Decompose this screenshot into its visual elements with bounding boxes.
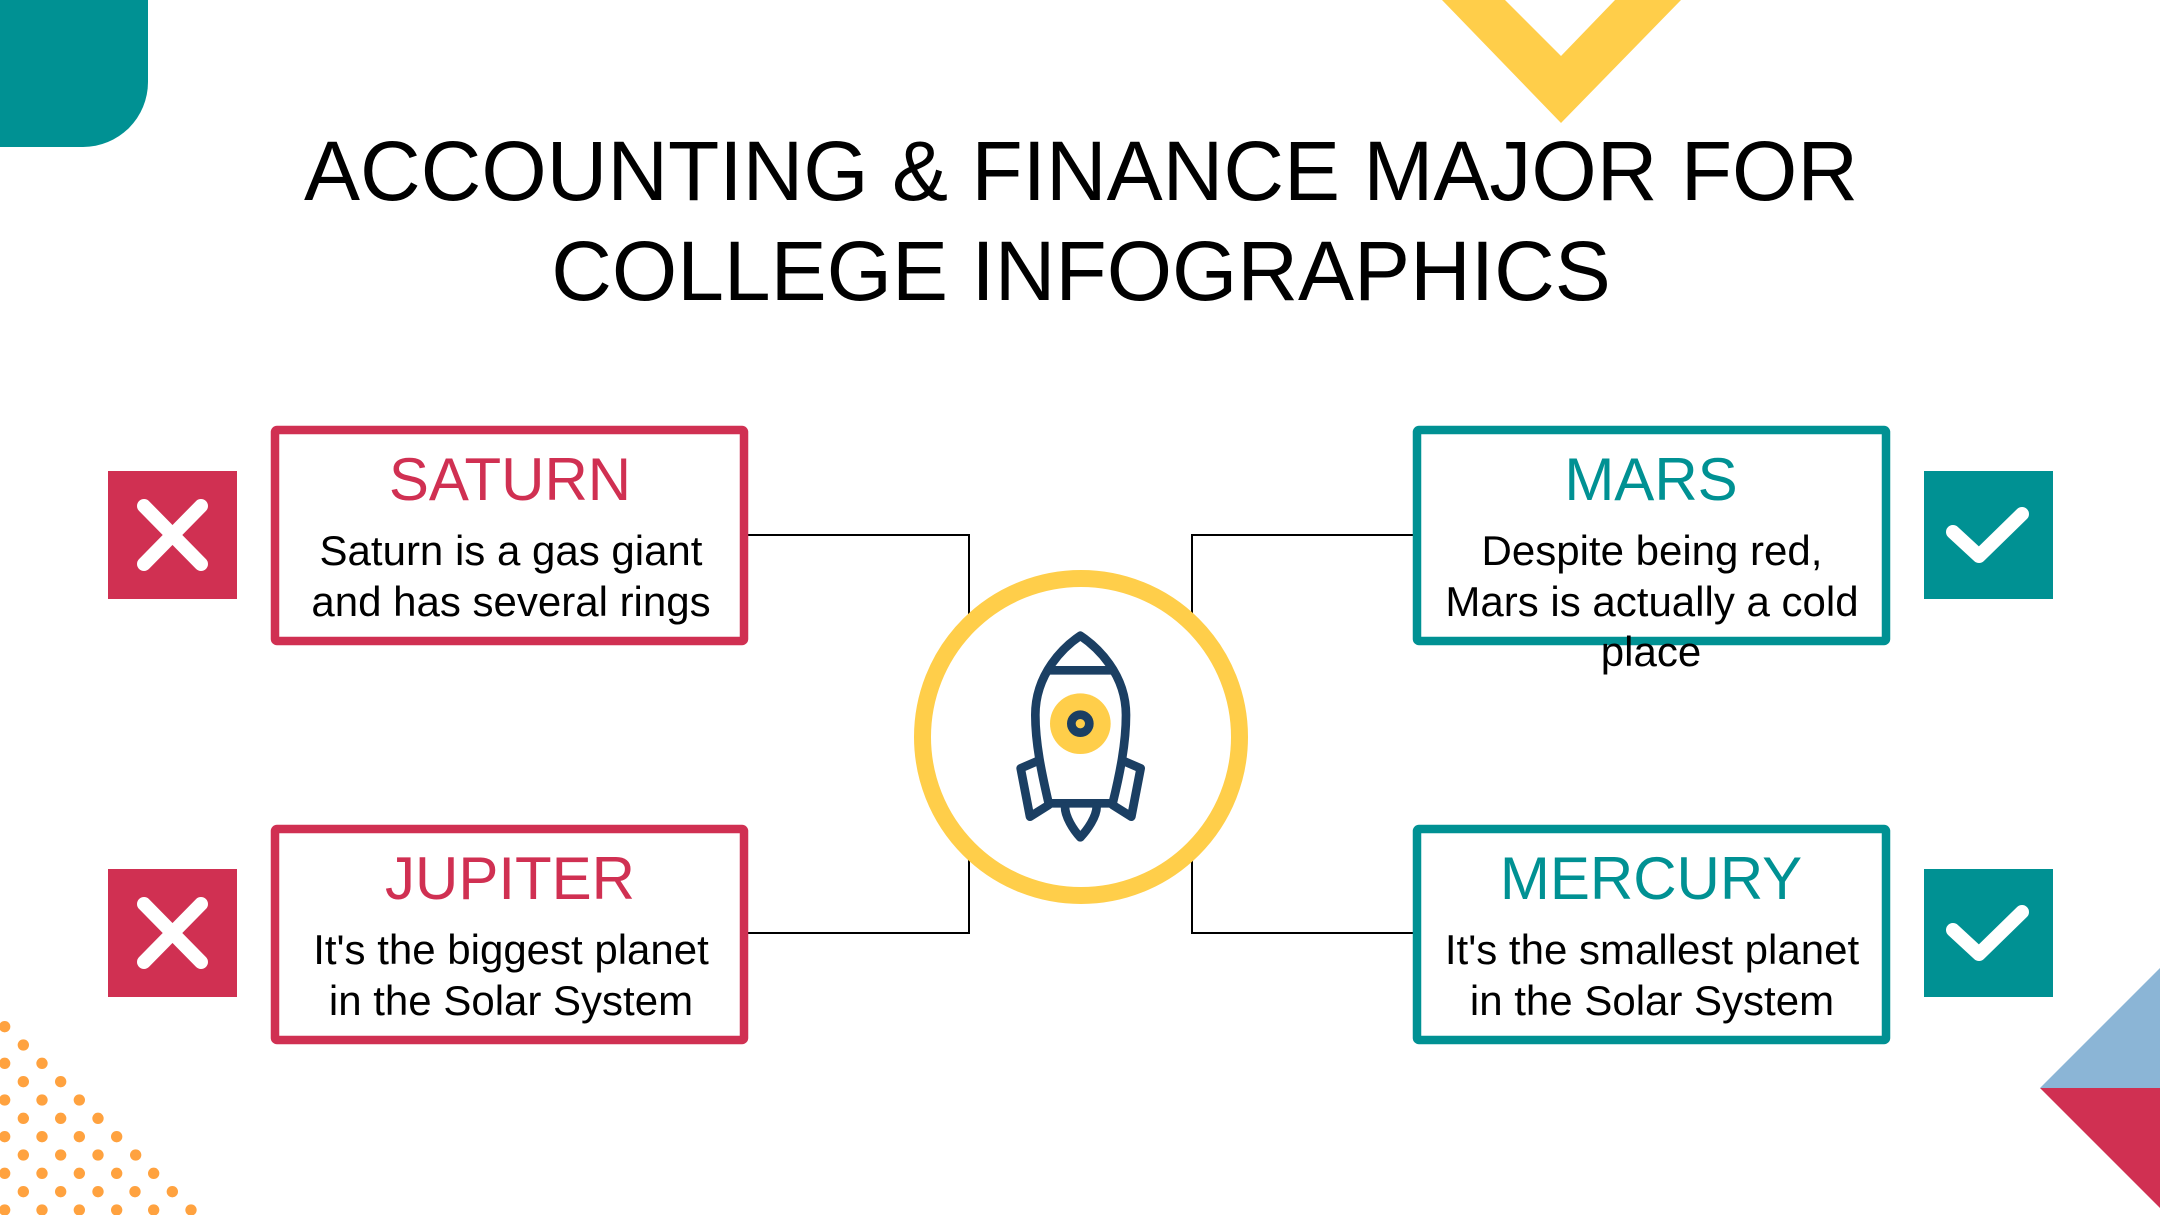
panel: Mercury: MERCURY: [1500, 845, 1802, 912]
panel: Saturn: SATURN: [389, 446, 631, 513]
panel: Jupiter: It's the biggest planet: [313, 926, 709, 973]
decorative orange dot triangle: [0, 1021, 197, 1215]
decorative yellow chevron: [1442, 0, 1681, 123]
title: COLLEGE INFOGRAPHICS: [551, 224, 1611, 318]
panel: Saturn: and has several rings: [311, 578, 711, 625]
decorative teal corner: [0, 0, 148, 147]
panel: Mars: Mars is actually a cold: [1445, 578, 1859, 625]
panel: Mercury: [1417, 829, 1886, 1040]
icon: Mercury check: [1924, 869, 2053, 997]
icon: Jupiter cross: [108, 869, 237, 997]
panel: Jupiter: in the Solar System: [329, 977, 693, 1024]
title: [304, 124, 1858, 318]
icon: Mars check: [1924, 471, 2053, 599]
panel: Mercury: It's the smallest planet: [1445, 926, 1859, 973]
panel: Mercury: in the Solar System: [1470, 977, 1834, 1024]
connector lines: [748, 535, 1413, 933]
icon: rocket: [1021, 636, 1141, 837]
panel: Jupiter: JUPITER: [385, 845, 635, 912]
panel: Mars: Despite being red,: [1482, 527, 1822, 574]
panel: Mars: MARS: [1564, 446, 1738, 513]
panel: Saturn: Saturn is a gas giant: [320, 527, 703, 574]
icon: Saturn cross: [108, 471, 237, 599]
panel: Jupiter: [275, 829, 744, 1040]
panel: Mars: place: [1601, 628, 1701, 675]
panel: Mars: [1417, 430, 1886, 675]
decorative corner triangles: [2040, 968, 2160, 1208]
panel: Saturn: [275, 430, 744, 641]
central rocket badge: [922, 578, 1240, 896]
title: ACCOUNTING & FINANCE MAJOR FOR: [304, 124, 1858, 218]
